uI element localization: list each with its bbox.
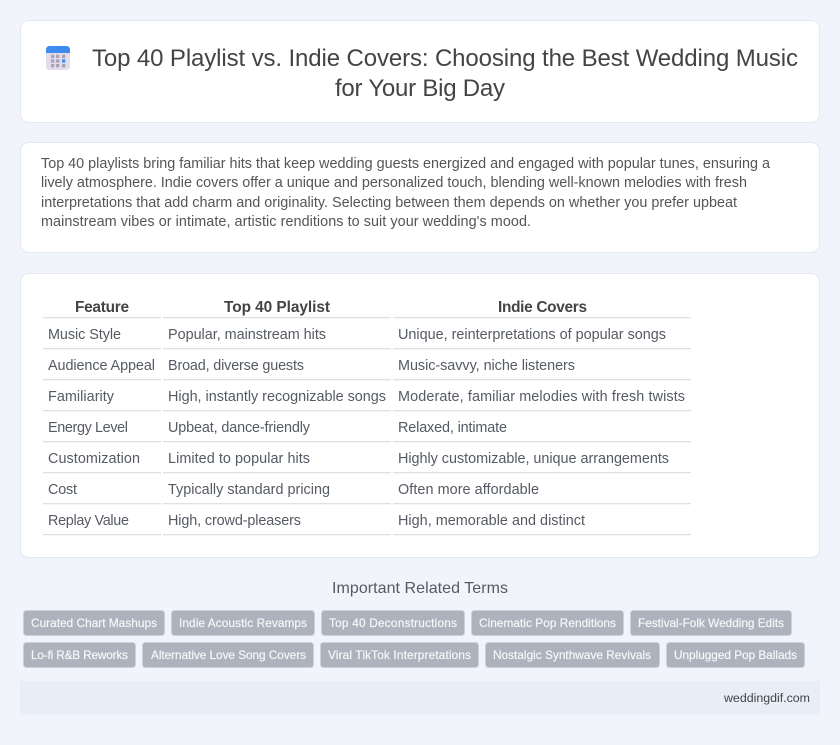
table header: Indie Covers [498,299,587,316]
related term tags [24,610,804,668]
tag: Top 40 Deconstructions [329,616,457,630]
tag: Indie Acoustic Revamps [179,616,307,630]
panel: intro paragraph [20,142,820,252]
row: replay value [48,513,585,529]
row: music style: Unique, reinterpretations of popular songs [398,327,666,343]
row: cost: Cost [48,482,77,498]
row: audience appeal [48,358,575,374]
title text: for Your Big Day [335,75,505,102]
row: customization [48,451,669,467]
tag [472,610,624,636]
tag [630,610,792,636]
row: customization: Limited to popular hits [168,451,310,467]
row: cost: Often more affordable [398,482,539,498]
tag [142,642,314,668]
row: familiarity: High, instantly recognizable songs [168,389,386,405]
title text: Top 40 Playlist vs. Indie Covers: Choosing the Best Wedding Music [92,45,798,72]
panel: comparison table [20,274,820,558]
table rules [43,317,691,535]
tag [24,642,136,668]
row: audience appeal: Broad, diverse guests [168,358,304,374]
row: energy level: Relaxed, intimate [398,420,507,436]
row: replay value: High, memorable and distinct [398,513,585,529]
row: music style: Music Style [48,327,121,343]
tag: Cinematic Pop Renditions [479,616,616,630]
tag [320,642,478,668]
tag: Viral TikTok Interpretations [328,648,471,662]
row: audience appeal: Audience Appeal [48,358,155,374]
paragraph text: lively atmosphere. Indie covers offer a unique and personalized touch, blending well-known melodies with fresh [41,175,747,191]
row: music style: Popular, mainstream hits [168,327,326,343]
heading: related terms: Important Related Terms [332,580,508,597]
paragraph text: interpretations that add charm and originality. Selecting between them depends on whether you prefer upbeat [41,195,737,211]
paragraph text: Top 40 playlists bring familiar hits that keep wedding guests energized and engaged with popular tunes, ensuring a [41,156,770,172]
tag [172,610,314,636]
row: energy level: Energy Level [48,420,128,436]
footer site name: weddingdif.com [723,691,810,705]
tag: Unplugged Pop Ballads [674,648,797,662]
row: familiarity [48,389,685,405]
row: replay value: Replay Value [48,513,129,529]
tag: Nostalgic Synthwave Revivals [493,648,651,662]
tag [666,642,804,668]
row: music style [48,327,666,343]
tag [24,610,164,636]
tag: Festival-Folk Wedding Edits [638,616,784,630]
footer [20,681,820,715]
table header: Top 40 Playlist [224,299,330,316]
tag: Lo-fi R&B Reworks [31,648,128,662]
tag: Alternative Love Song Covers [151,648,306,662]
panel: title [20,20,820,122]
row: cost [48,482,539,498]
row: cost: Typically standard pricing [168,482,330,498]
tag [322,610,464,636]
table header: Feature [75,299,129,316]
row: energy level [48,420,507,436]
row: energy level: Upbeat, dance-friendly [168,420,311,436]
tag: Curated Chart Mashups [31,616,157,630]
icon: calendar [46,46,70,70]
tag [486,642,660,668]
row: customization: Customization [48,451,140,467]
row: customization: Highly customizable, unique arrangements [398,451,669,467]
table header [75,299,587,316]
row: audience appeal: Music-savvy, niche listeners [398,358,575,374]
row: familiarity: Moderate, familiar melodies with fresh twists [398,389,685,405]
row: familiarity: Familiarity [48,389,115,405]
paragraph text: mainstream vibes or intimate, artistic renditions to suit your wedding's mood. [41,214,531,230]
row: replay value: High, crowd-pleasers [168,513,301,529]
